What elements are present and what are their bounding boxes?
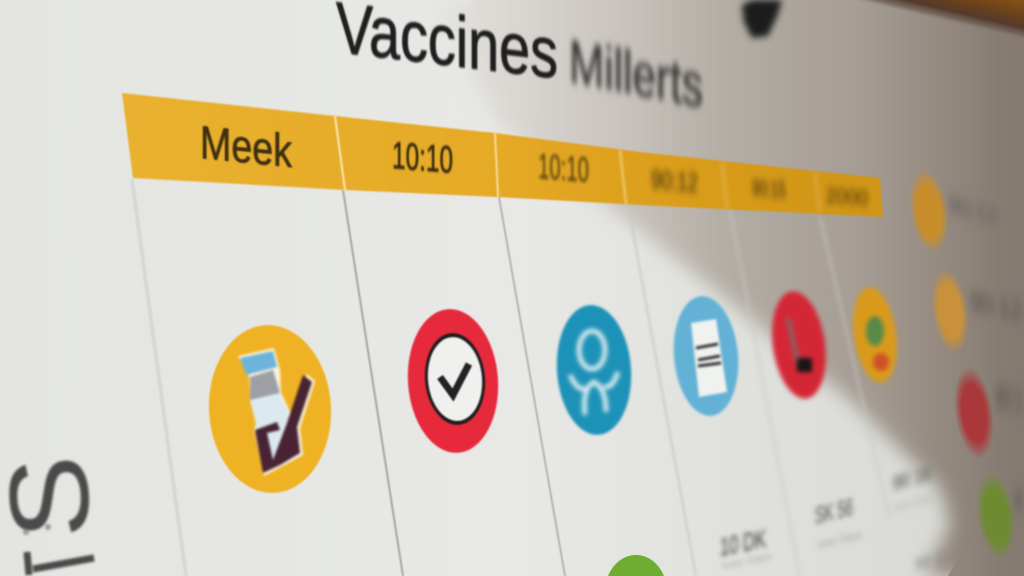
column note: far right: 90 1 bbox=[915, 547, 943, 573]
header label: 10:10 second: 10:10 bbox=[538, 147, 589, 190]
legend label: amber: 90:12 bbox=[970, 286, 1022, 326]
column note: SK 56 bbox=[815, 494, 862, 552]
column note: 10 DK: Ineo Days bbox=[722, 550, 772, 573]
shadow core bbox=[470, 0, 1024, 576]
title bbox=[336, 0, 703, 122]
black pin bbox=[742, 0, 782, 38]
legend label: orange: 90:12 bbox=[948, 192, 998, 230]
column note: SK 56: Ineo Days bbox=[818, 527, 862, 552]
legend label: green: 9 bbox=[1014, 485, 1022, 517]
header label: 10:10 first: 10:10 bbox=[392, 136, 453, 182]
column note: far right: Ineo Days bbox=[894, 491, 934, 515]
header label: 90:12: 90:12 bbox=[651, 164, 698, 198]
header label: 2000: 2000 bbox=[826, 183, 868, 210]
column note: far right bbox=[893, 461, 943, 573]
column note: 10 DK: 10 DK bbox=[720, 523, 766, 562]
legend icon: orange bbox=[904, 167, 954, 255]
icon: orange and green badge bbox=[848, 285, 902, 385]
column note: far right: 90 16 bbox=[893, 461, 931, 495]
legend icon: green bbox=[971, 470, 1021, 562]
header band bbox=[122, 93, 883, 217]
icon: yellow vial and check badge bbox=[205, 322, 335, 496]
column lines bbox=[132, 180, 890, 576]
icon: light blue document badge bbox=[669, 293, 743, 419]
header label: Meek: Meek bbox=[200, 118, 292, 178]
icon: blue person badge bbox=[553, 303, 635, 437]
shadow soft edge bbox=[430, 0, 1024, 576]
title: Millerts bbox=[569, 27, 703, 122]
icon: green badge bottom bbox=[608, 555, 664, 576]
legend icon: amber bbox=[926, 266, 974, 356]
column note: SK 56: SK 56 bbox=[815, 494, 853, 530]
column note: 10 DK bbox=[720, 523, 772, 573]
header label: 90:15: 90:15 bbox=[752, 176, 786, 204]
icon: red badge with check bbox=[403, 306, 503, 456]
wood frame corner bbox=[850, 0, 1024, 40]
icon: red tool badge bbox=[766, 288, 832, 402]
legend icon: red bbox=[949, 365, 999, 461]
